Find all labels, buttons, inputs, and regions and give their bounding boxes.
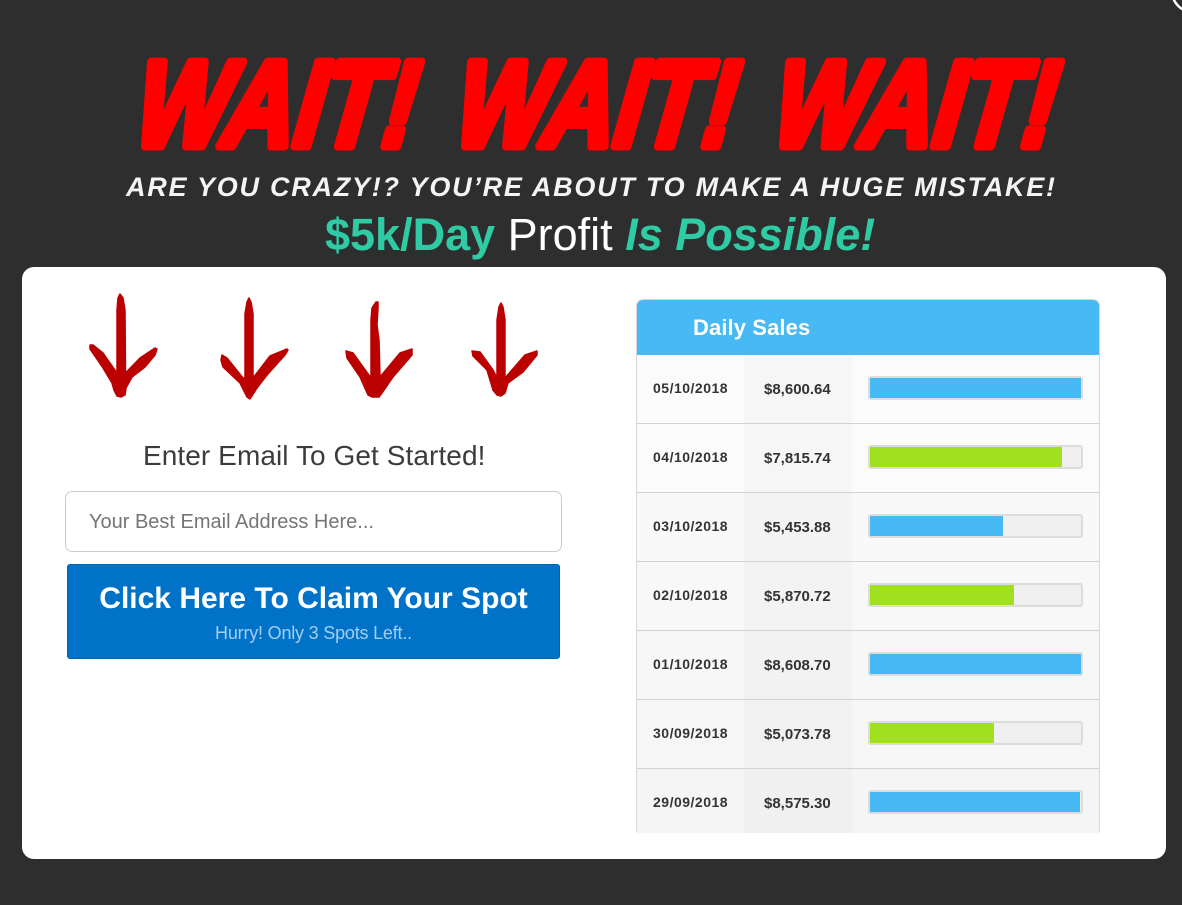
row 30/09/2018 [637,700,1099,769]
row 05/10/2018: 05/10/2018 [653,380,728,396]
row 01/10/2018: 01/10/2018 [653,656,728,672]
icon: close button arc [1172,0,1182,10]
row 29/09/2018: $8,575.30 [764,795,831,812]
row 04/10/2018 [637,424,1099,493]
icon: arrow 2 [221,298,288,399]
icon: arrow 3 [346,302,412,397]
row 05/10/2018 [637,355,1099,424]
panel: white card [22,267,1166,859]
row 30/09/2018: 30/09/2018 [653,725,728,741]
icon: arrow 4 [472,303,537,396]
row 01/10/2018: $8,608.70 [764,657,831,674]
table header: Daily Sales [693,315,810,340]
row 01/10/2018 [637,631,1099,700]
button title: Click Here To Claim Your Spot [99,582,528,615]
icon: arrow 1 [90,294,157,397]
headline: profit is possible: $5k/Day Profit Is Possible! [325,209,875,260]
row 02/10/2018: 02/10/2018 [653,587,728,603]
email input field [65,491,562,552]
row 05/10/2018: $8,600.64 [764,381,831,398]
row 30/09/2018: $5,073.78 [764,726,831,743]
arrows: four red hand-drawn down arrows [89,293,538,400]
row 03/10/2018: 03/10/2018 [653,518,728,534]
row 03/10/2018: $5,453.88 [764,519,831,536]
row 03/10/2018 [637,493,1099,562]
subtitle: are you crazy: ARE YOU CRAZY!? YOU’RE ABOUT TO MAKE A HUGE MISTAKE! [125,172,1055,202]
table header [637,300,1099,355]
row 04/10/2018: 04/10/2018 [653,449,728,465]
title: wait wait wait: WAIT! [130,35,427,170]
row 29/09/2018: 29/09/2018 [653,794,728,810]
email input field: Your Best Email Address Here... [89,511,374,533]
row 04/10/2018: $7,815.74 [764,450,831,467]
heading: enter email: Enter Email To Get Started! [143,440,485,471]
row 02/10/2018: $5,870.72 [764,588,831,605]
button: claim your spot [67,564,560,659]
row 29/09/2018 [637,769,1099,838]
button subtitle: Hurry! Only 3 Spots Left.. [215,623,412,643]
title: wait wait wait: WAIT! [450,35,747,170]
panel: daily sales table [636,299,1100,833]
title: wait wait wait [130,35,1067,170]
title: wait wait wait: WAIT! [768,35,1067,170]
row 02/10/2018 [637,562,1099,631]
